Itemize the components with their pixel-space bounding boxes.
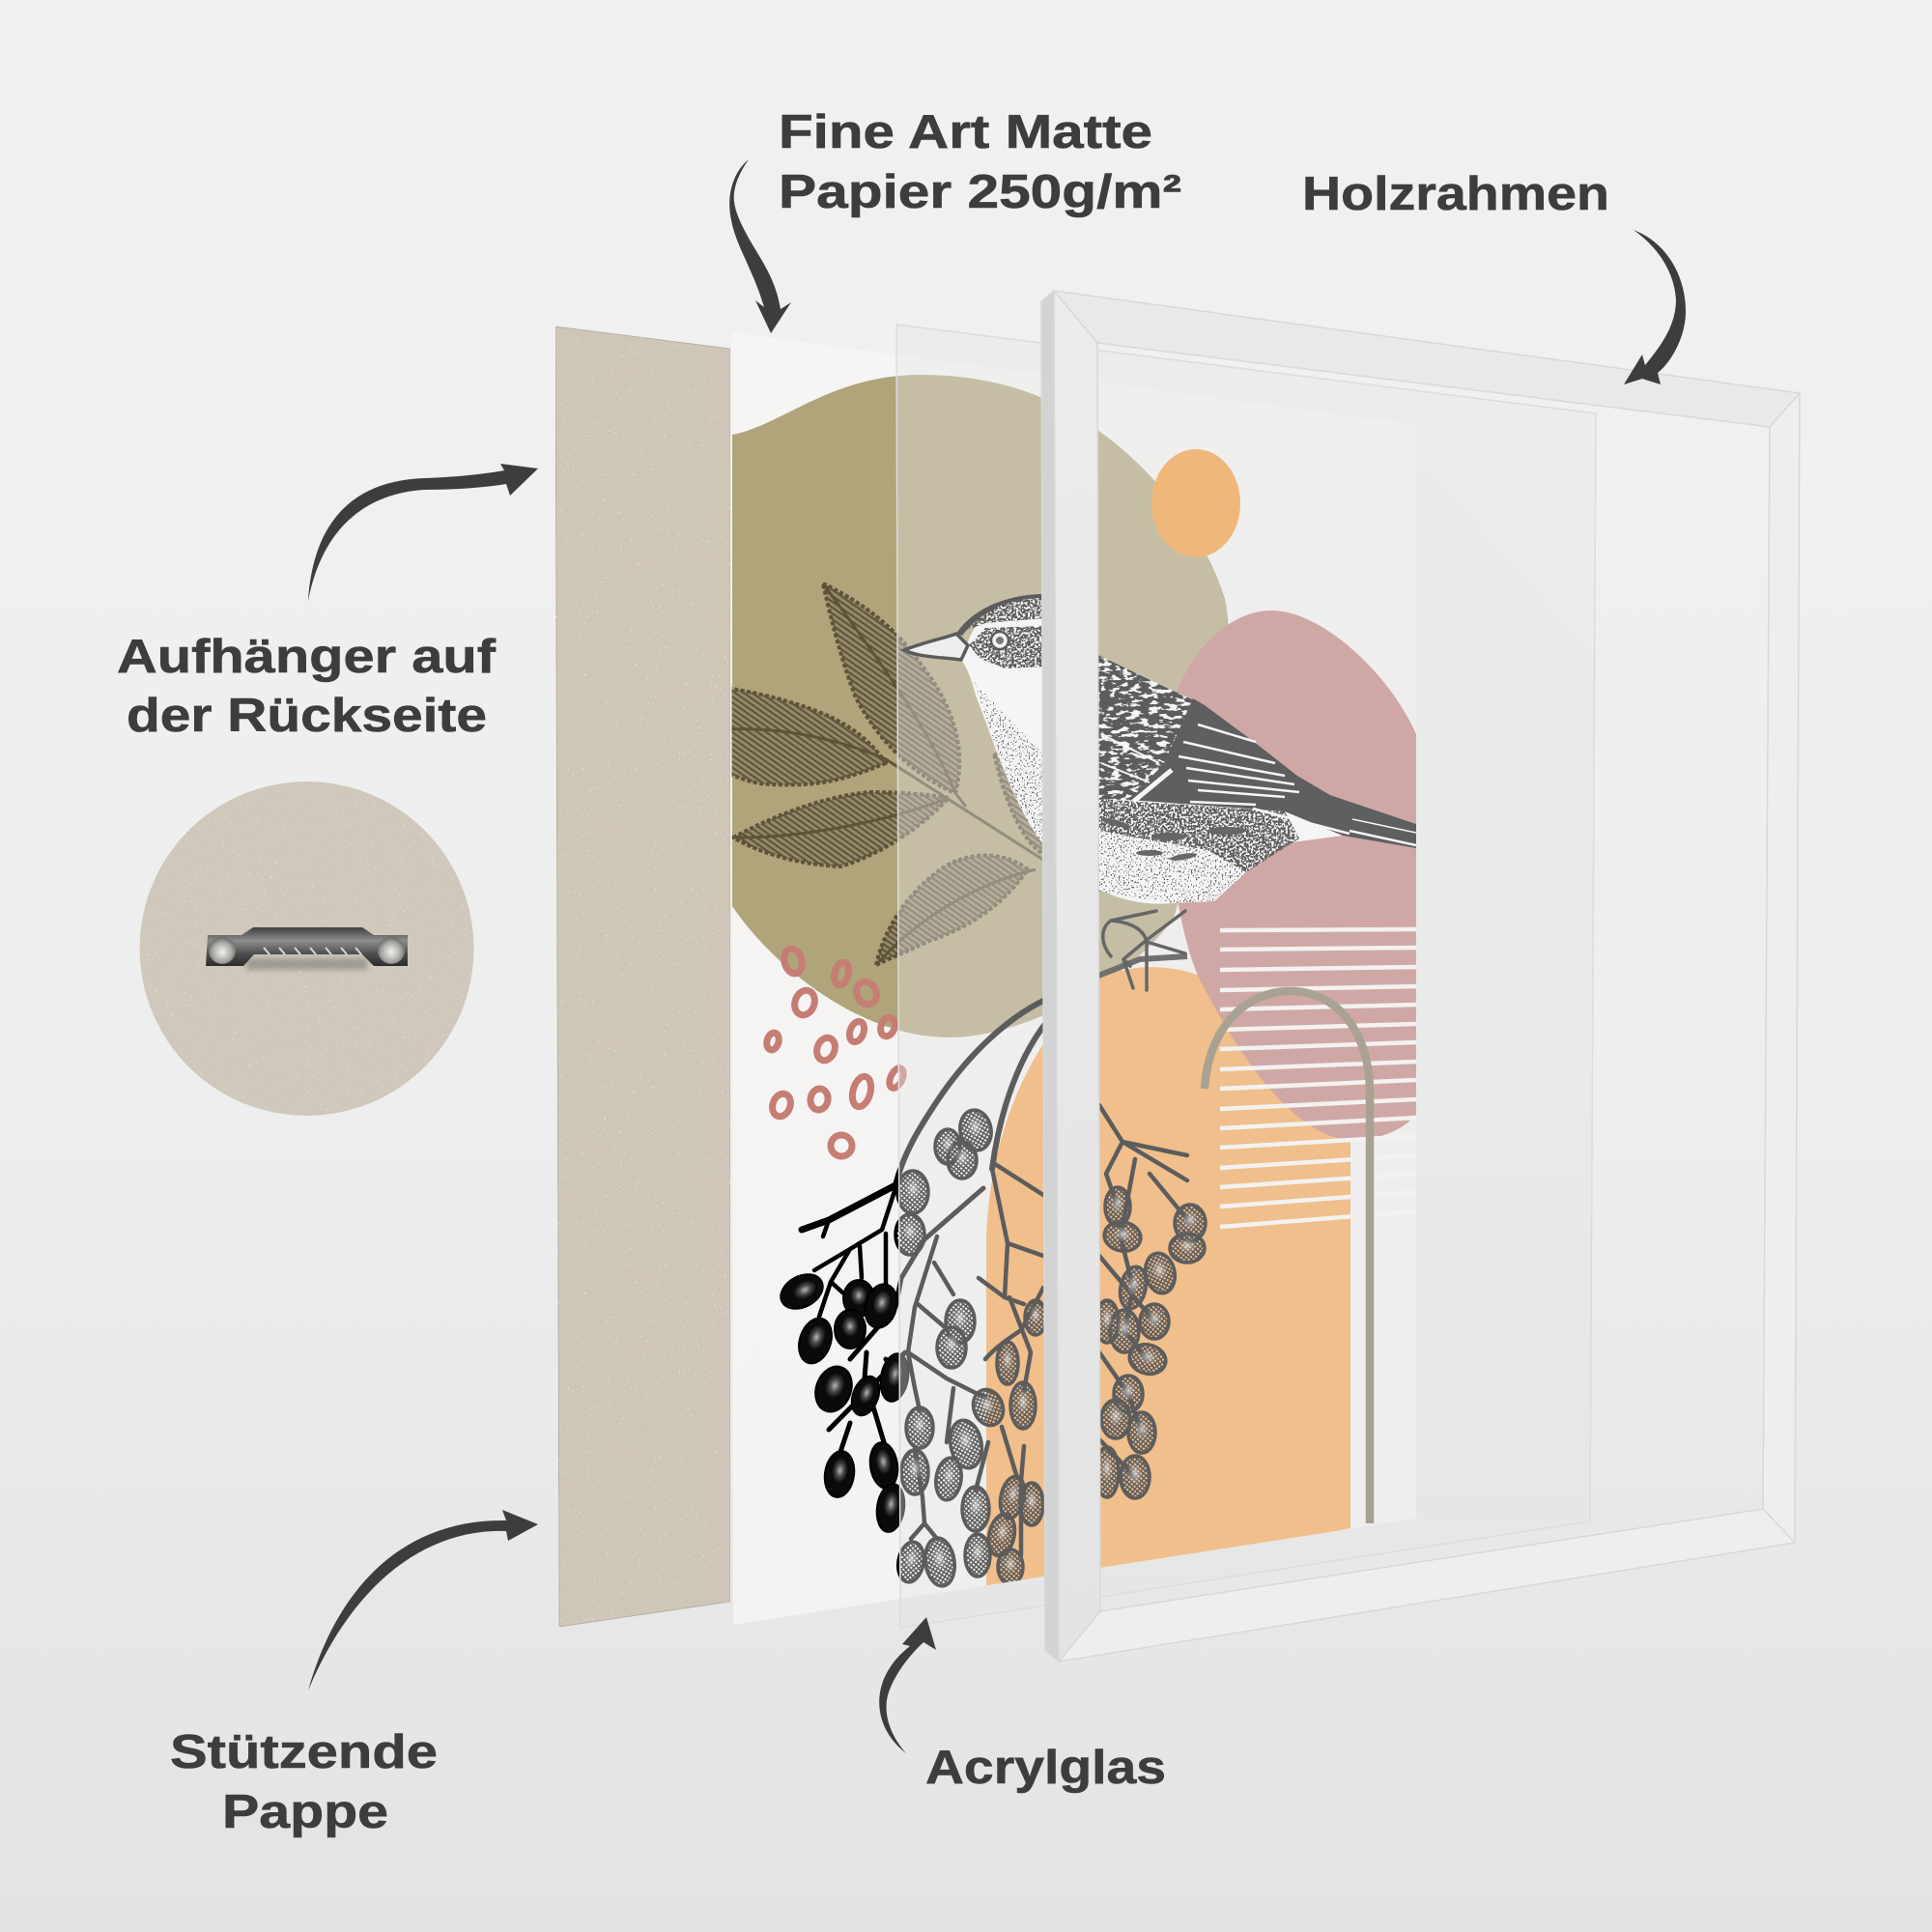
- label: supporting cardboard: Pappe: [222, 1786, 388, 1838]
- panel: wooden frame: [1041, 291, 1800, 1662]
- gray arch: [1205, 991, 1370, 1523]
- bird lower mottled band: [1098, 799, 1299, 872]
- frame left bar: [1054, 291, 1100, 1662]
- bird: [904, 594, 1416, 990]
- bird cap top line: [956, 594, 1045, 636]
- label: acrylic glass: Acrylglas: [925, 1742, 1166, 1794]
- arrow: to paper: [729, 159, 791, 333]
- belly dark dashes: [1100, 816, 1246, 862]
- red ring dots: [765, 947, 906, 1160]
- bird wing mottled: [1099, 655, 1205, 800]
- label: supporting cardboard: Stützende: [170, 1726, 438, 1778]
- panel: acrylic glass: [896, 325, 1596, 1628]
- bird wing dark feathers: [1130, 698, 1416, 848]
- bird perch branch: [1098, 956, 1187, 976]
- engraved leaves: [726, 583, 1045, 965]
- label: fine art paper: [779, 106, 1181, 218]
- arrow: to acrylic: [879, 1617, 936, 1753]
- label: hanger: der Rückseite: [127, 690, 487, 742]
- bird head cap: [958, 594, 1041, 632]
- pink blob: [1169, 611, 1416, 1140]
- right rivet: [378, 937, 405, 964]
- hanger teeth: [264, 948, 361, 954]
- label: fine art paper: Fine Art Matte: [779, 106, 1152, 158]
- arrow: to cardboard: [308, 1510, 538, 1690]
- arrow: to frame: [1624, 230, 1686, 384]
- bird eye: [991, 632, 1009, 649]
- white stripes: [1220, 929, 1416, 1227]
- frame top bar: [1054, 291, 1800, 427]
- hanger shadow: [246, 958, 367, 970]
- orange ellipse: [1151, 449, 1240, 557]
- panel: hanger detail circle: [139, 781, 473, 1116]
- bird belly stipple: [1098, 831, 1246, 903]
- paper gap right of orange: [1350, 1144, 1366, 1530]
- label: wooden frame: Holzrahmen: [1302, 168, 1609, 220]
- label: fine art paper: Papier 250g/m²: [779, 166, 1181, 218]
- bird feet: [1103, 911, 1185, 990]
- wing white streaks: [1101, 724, 1416, 845]
- arrow: to hanger back: [308, 464, 538, 601]
- bird body: [961, 594, 1416, 904]
- label: hanger: [117, 631, 497, 742]
- frame bottom bar: [1059, 1509, 1795, 1662]
- frame right bar: [1763, 393, 1800, 1543]
- leaf stems and veins: [726, 583, 1043, 965]
- black berries: [775, 1267, 912, 1534]
- bird eye patch: [969, 626, 1045, 668]
- left rivet: [209, 937, 236, 964]
- bird beak: [904, 634, 968, 660]
- orange shape: [986, 967, 1350, 1604]
- label: hanger: Aufhänger auf: [117, 631, 497, 683]
- sawtooth hanger plate: [206, 927, 408, 966]
- frame side face: [1041, 291, 1059, 1662]
- branches: [802, 1000, 1190, 1555]
- panel: fine art paper with artwork: [724, 319, 1430, 1633]
- cardboard circle: [139, 781, 473, 1116]
- glass reflection: [1416, 454, 1594, 1521]
- hatched berries: [895, 1108, 1206, 1588]
- panel: supporting cardboard: [555, 327, 730, 1627]
- bird breast stipple: [974, 682, 1042, 840]
- olive blob: [732, 375, 1229, 1037]
- label: supporting cardboard: [170, 1726, 438, 1838]
